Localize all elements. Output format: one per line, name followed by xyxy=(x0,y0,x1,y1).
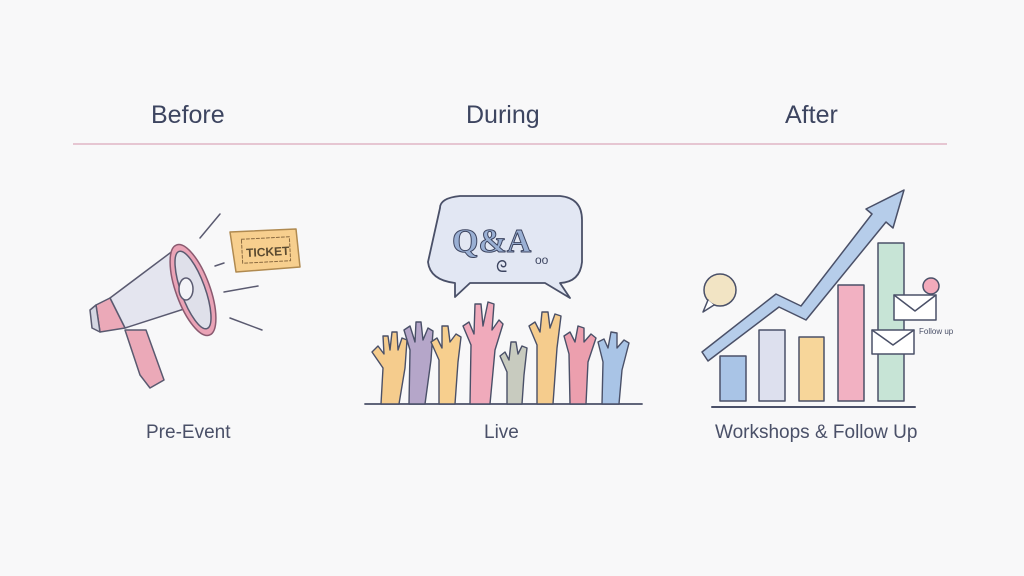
icon: Q&A speech bubble xyxy=(428,196,582,298)
icon: Q&A speech bubble: ᘓ xyxy=(496,259,507,276)
label: Pre-Event: Pre-Event xyxy=(146,422,230,443)
icon: ticket xyxy=(230,229,300,272)
label: Workshops & Follow Up: Workshops & Follow Up xyxy=(715,422,917,443)
icon: ticket: TICKET xyxy=(246,244,290,260)
icon: chat bubble xyxy=(704,274,736,306)
label: Live: Live xyxy=(484,422,519,443)
heading: During: During xyxy=(466,101,540,129)
icon: envelopes xyxy=(894,295,936,320)
icon: megaphone xyxy=(90,214,262,388)
icon: raised hands xyxy=(365,302,642,404)
arrow xyxy=(702,190,904,361)
heading: Before: Before xyxy=(151,101,225,129)
divider line xyxy=(73,143,947,145)
icon: Q&A speech bubble: oo xyxy=(535,253,549,267)
bar chart with arrow xyxy=(702,190,939,407)
note text: follow up: Follow up xyxy=(919,327,954,336)
icon: Q&A speech bubble: Q&A xyxy=(452,223,532,260)
heading: After: After xyxy=(785,101,838,129)
